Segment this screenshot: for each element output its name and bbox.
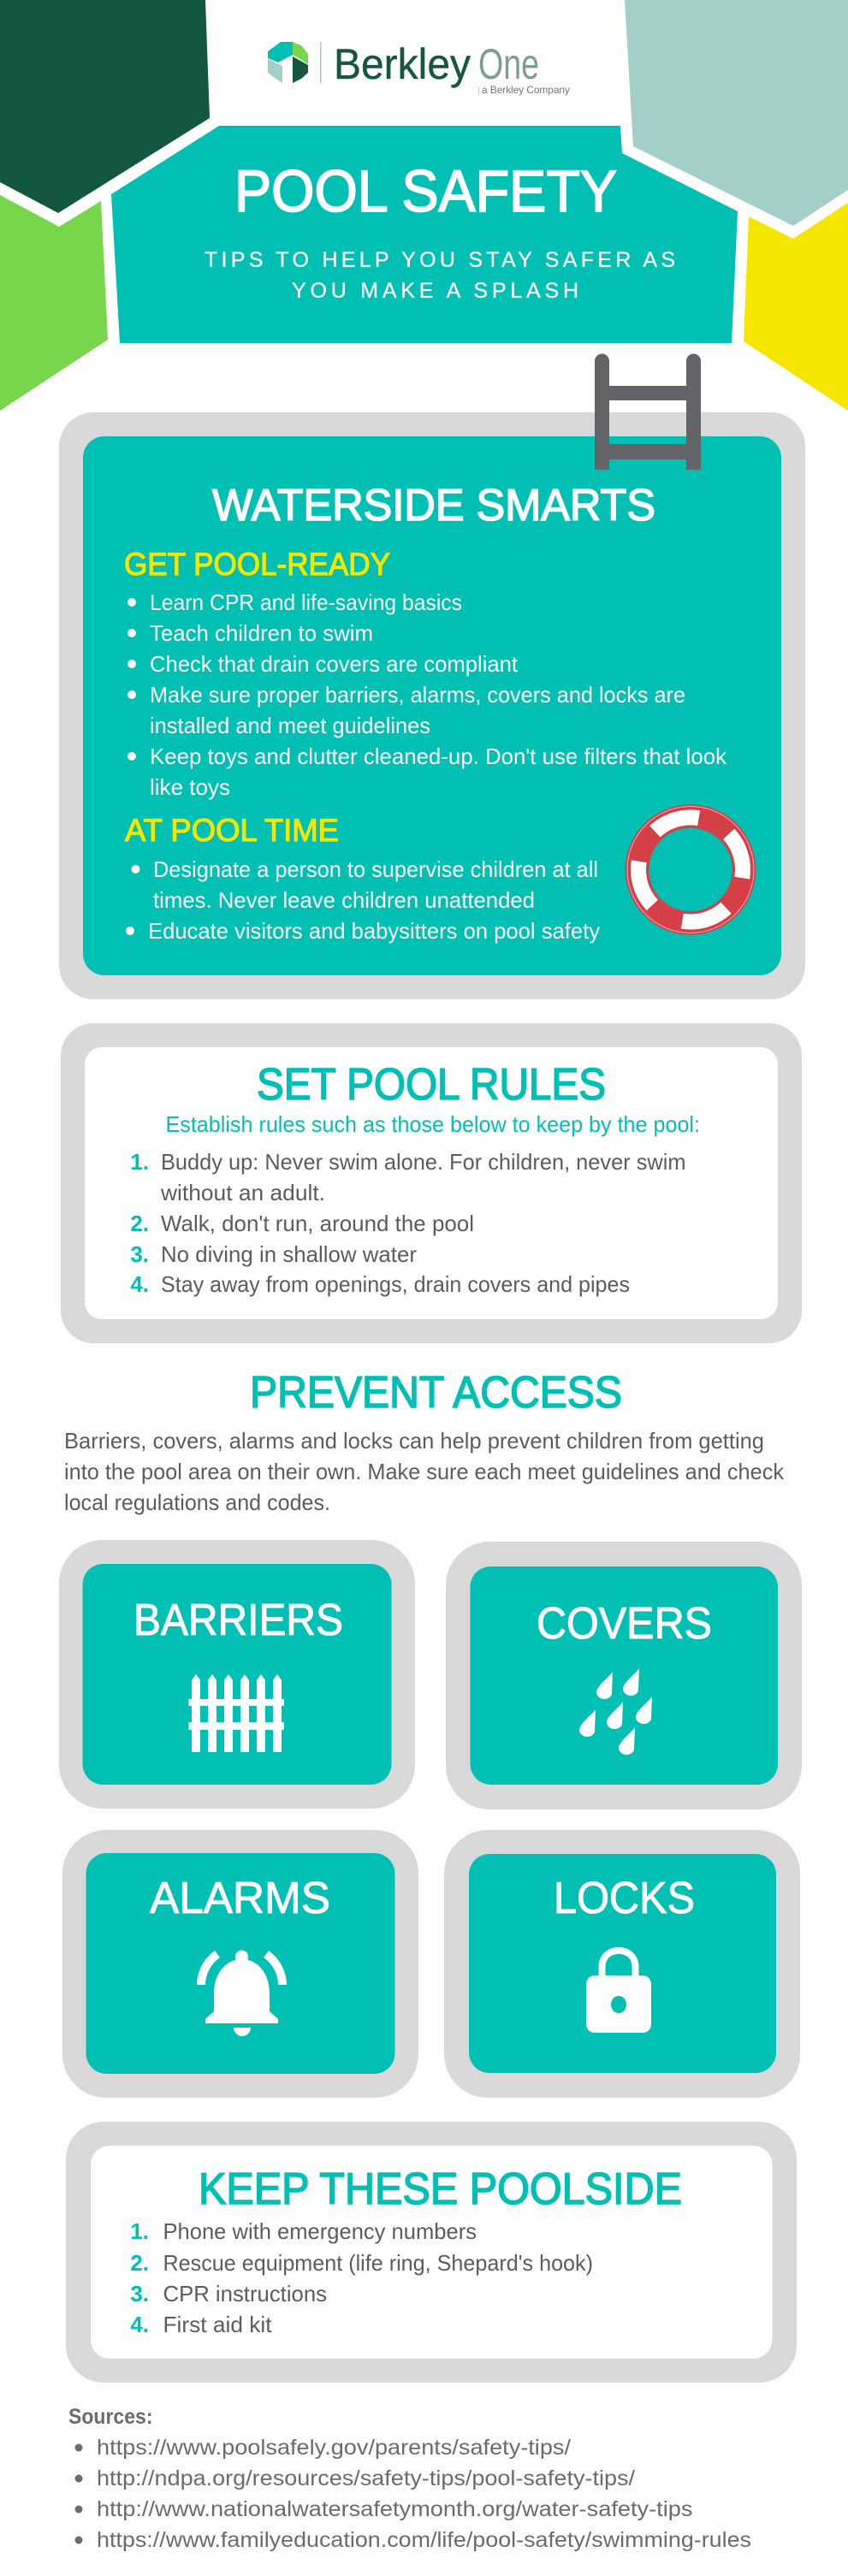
logo: Berkley One: One (478, 40, 539, 88)
list: at pool time: times. Never leave children unattended (153, 887, 535, 913)
sources: http://ndpa.org/resources/safety-tips/pool-safety-tips/ (97, 2466, 635, 2490)
numbered poolside list: Phone with emergency numbers (163, 2218, 477, 2244)
list: at pool time: Educate visitors and babysitters on pool safety (148, 918, 600, 944)
numbered rules list (130, 1149, 686, 1297)
logo: Berkley One: Berkley (334, 40, 471, 88)
header shape: dark green (0, 0, 210, 213)
list: get pool-ready (127, 589, 727, 800)
panel: waterside smarts (59, 412, 805, 999)
card: locks: LOCKS (554, 1874, 695, 1923)
card: barriers (59, 1540, 415, 1809)
card: alarms: ALARMS (150, 1874, 330, 1923)
icon: water drops (579, 1668, 652, 1755)
numbered rules list: Buddy up: Never swim alone. For children, never swim (161, 1149, 686, 1175)
intro text: Establish rules such as those below to keep by the pool: (166, 1111, 700, 1137)
icon: padlock (586, 1951, 651, 2033)
header shape: light green (0, 195, 108, 411)
heading: prevent access: PREVENT ACCESS (250, 1368, 622, 1418)
panel: keep these poolside (66, 2122, 797, 2383)
numbered rules list: 2. (130, 1211, 149, 1236)
paragraph: prevent access: local regulations and codes. (64, 1489, 330, 1515)
subtitle (205, 248, 675, 303)
header shape: yellow (744, 203, 848, 411)
paragraph: prevent access (64, 1428, 785, 1515)
numbered poolside list (130, 2218, 593, 2337)
card: barriers: BARRIERS (133, 1596, 343, 1645)
heading: keep these poolside: KEEP THESE POOLSIDE (199, 2164, 682, 2214)
icon: fence (188, 1674, 284, 1752)
icon: bell (201, 1951, 282, 2036)
numbered poolside list: 4. (130, 2312, 149, 2337)
heading: set pool rules: SET POOL RULES (257, 1060, 606, 1110)
list: get pool-ready: Learn CPR and life-saving basics (150, 589, 462, 615)
numbered rules list: 1. (130, 1149, 149, 1175)
numbered poolside list: Rescue equipment (life ring, Shepard's hook) (163, 2250, 593, 2276)
list: get pool-ready: like toys (150, 774, 230, 800)
subtitle: TIPS TO HELP YOU STAY SAFER AS (205, 248, 675, 272)
numbered rules list: Stay away from openings, drain covers and pipes (161, 1271, 630, 1297)
numbered rules list: No diving in shallow water (161, 1241, 417, 1267)
paragraph: prevent access: Barriers, covers, alarms and locks can help prevent children from getting (64, 1428, 764, 1454)
list: get pool-ready: Teach children to swim (150, 620, 373, 646)
logo: Berkley One (268, 40, 570, 96)
list: get pool-ready: installed and meet guidelines (150, 713, 430, 738)
title: POOL SAFETY (234, 158, 617, 224)
numbered rules list: 3. (130, 1241, 149, 1267)
sources: http://www.nationalwatersafetymonth.org/water-safety-tips (97, 2497, 693, 2521)
list: get pool-ready: Check that drain covers are compliant (150, 651, 519, 677)
numbered poolside list: First aid kit (163, 2312, 272, 2337)
icon: pool ladder (595, 354, 701, 470)
list: at pool time: Designate a person to supervise children at all (153, 856, 598, 882)
list: get pool-ready: Keep toys and clutter cleaned-up. Don't use filters that look (150, 743, 727, 769)
panel: set pool rules (61, 1023, 802, 1343)
subtitle: YOU MAKE A SPLASH (292, 279, 578, 303)
title panel (111, 126, 738, 343)
list: get pool-ready: Make sure proper barriers, alarms, covers and locks are (150, 682, 685, 708)
sources: https://www.poolsafely.gov/parents/safety-tips/ (97, 2436, 571, 2460)
card: covers: COVERS (537, 1599, 712, 1649)
numbered poolside list: CPR instructions (163, 2281, 327, 2307)
subheading: get pool-ready: GET POOL-READY (124, 547, 390, 582)
sources: https://www.familyeducation.com/life/pool-safety/swimming-rules (97, 2528, 751, 2552)
numbered poolside list: 2. (130, 2250, 149, 2276)
numbered rules list: Walk, don't run, around the pool (161, 1211, 474, 1236)
numbered rules list: without an adult. (160, 1180, 325, 1205)
numbered poolside list: 3. (130, 2281, 149, 2307)
header shape: pale teal (625, 0, 848, 226)
icon: life ring (617, 796, 764, 944)
card: alarms (62, 1830, 418, 2098)
sources (68, 2405, 751, 2552)
list: at pool time (126, 856, 600, 944)
numbered rules list: 4. (130, 1271, 149, 1297)
card: covers (446, 1542, 802, 1809)
card: locks (444, 1830, 800, 2098)
subheading: at pool time: AT POOL TIME (125, 813, 339, 848)
numbered poolside list: 1. (130, 2218, 149, 2244)
paragraph: prevent access: into the pool area on their own. Make sure each meet guidelines and check (64, 1459, 785, 1484)
heading: waterside smarts: WATERSIDE SMARTS (212, 481, 655, 530)
logo: Berkley One: a Berkley Company (482, 84, 570, 96)
sources: Sources: (68, 2405, 152, 2429)
